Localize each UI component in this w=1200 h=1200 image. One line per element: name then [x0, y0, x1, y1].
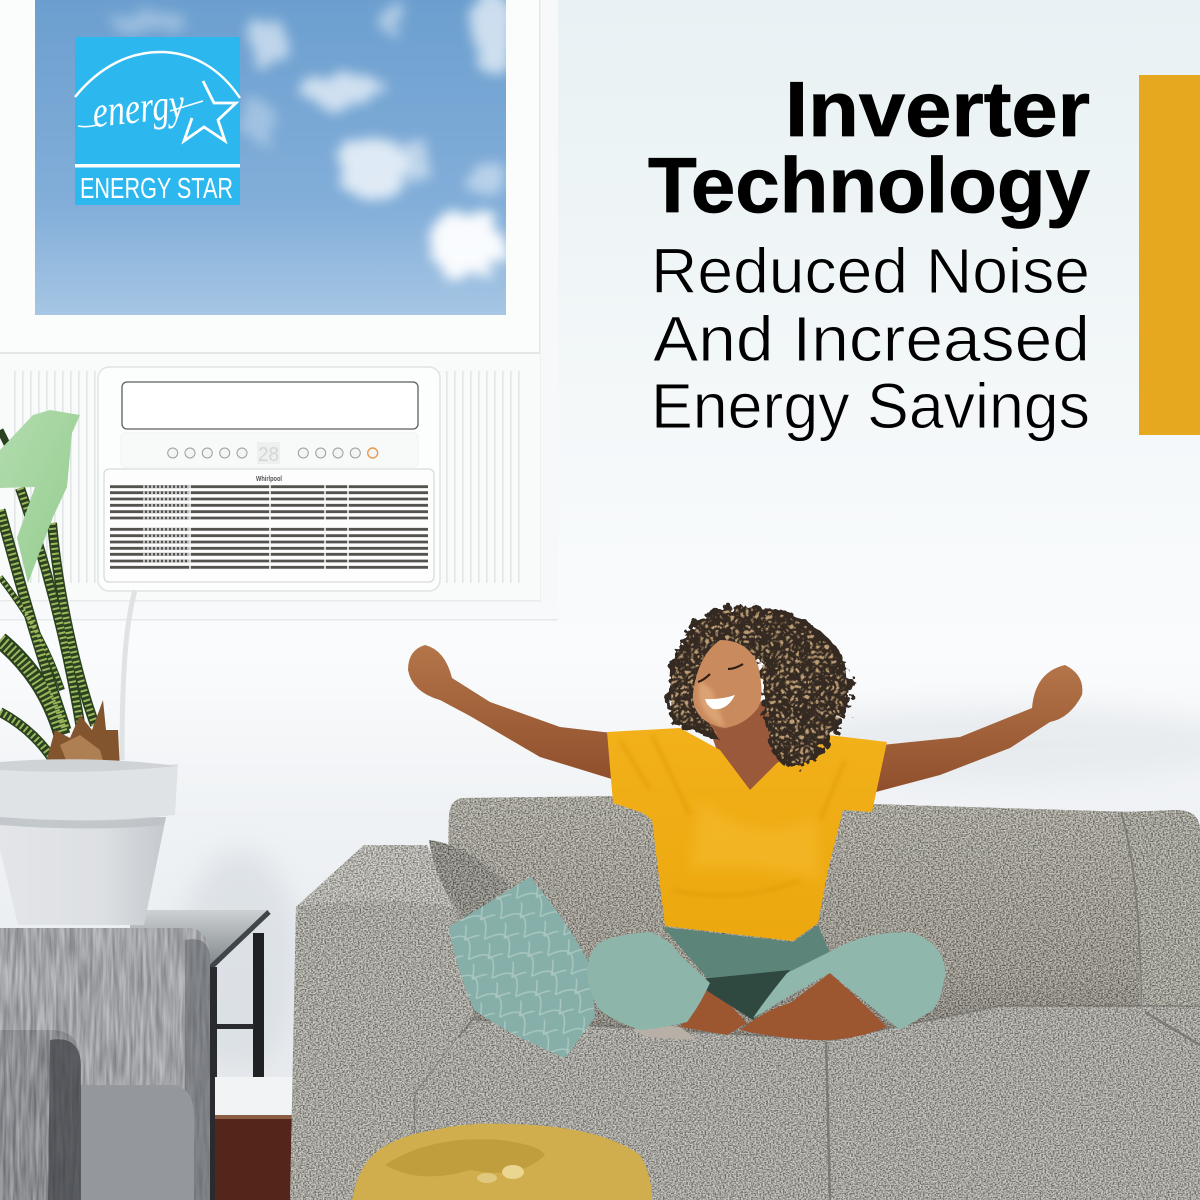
- hair: [668, 604, 851, 768]
- clouds: [114, 0, 512, 279]
- neck and chest: [705, 700, 782, 794]
- subheading: Reduced Noise And Increased Energy Savings: And Increased: [653, 303, 1090, 375]
- plant: [0, 410, 120, 773]
- subheading: Reduced Noise And Increased Energy Savings: [651, 235, 1090, 442]
- air conditioner side curtains: [0, 354, 558, 620]
- window with sky: [0, 0, 558, 620]
- woman: [408, 604, 1082, 1040]
- Energy Star logo: energy: [90, 79, 187, 137]
- subheading: Reduced Noise And Increased Energy Savings: Reduced Noise: [651, 235, 1090, 307]
- plant pot: [0, 759, 178, 925]
- sofa back cushions: [448, 796, 1200, 1050]
- Energy Star logo: [75, 37, 240, 205]
- Energy Star logo: ENERGY STAR: [80, 173, 233, 205]
- subheading: Reduced Noise And Increased Energy Savings: Energy Savings: [651, 370, 1090, 442]
- sofa seat: [412, 1006, 1200, 1200]
- side table: [130, 910, 269, 1200]
- top air outlet: [122, 382, 418, 429]
- sock: [633, 1023, 697, 1040]
- arms: [408, 645, 1082, 792]
- wall shading: [180, 707, 1200, 1070]
- front grille: Whirlpool: [256, 474, 282, 483]
- heading: Inverter Technology: Inverter: [785, 65, 1090, 153]
- front grille: [104, 469, 434, 582]
- floor: [215, 1077, 295, 1200]
- face: [693, 640, 762, 728]
- striped stems: [0, 430, 95, 768]
- yellow t-shirt: [607, 728, 887, 941]
- calves: [680, 973, 887, 1040]
- air conditioner unit: [98, 367, 440, 591]
- pants: [587, 925, 945, 1030]
- pouf: [352, 1124, 652, 1200]
- green leaf: [0, 410, 80, 583]
- accent bar: [1139, 75, 1200, 435]
- power cord: [122, 590, 135, 760]
- heading: Inverter Technology: Technology: [648, 141, 1090, 229]
- pillows: [429, 840, 595, 1058]
- sofa left arm: [290, 845, 474, 1200]
- heading: Inverter Technology: [648, 65, 1090, 229]
- control panel: [121, 433, 418, 467]
- armchair: [0, 928, 210, 1200]
- sofa: [290, 796, 1200, 1200]
- control panel: 28: [258, 444, 279, 466]
- plant base: [43, 700, 120, 773]
